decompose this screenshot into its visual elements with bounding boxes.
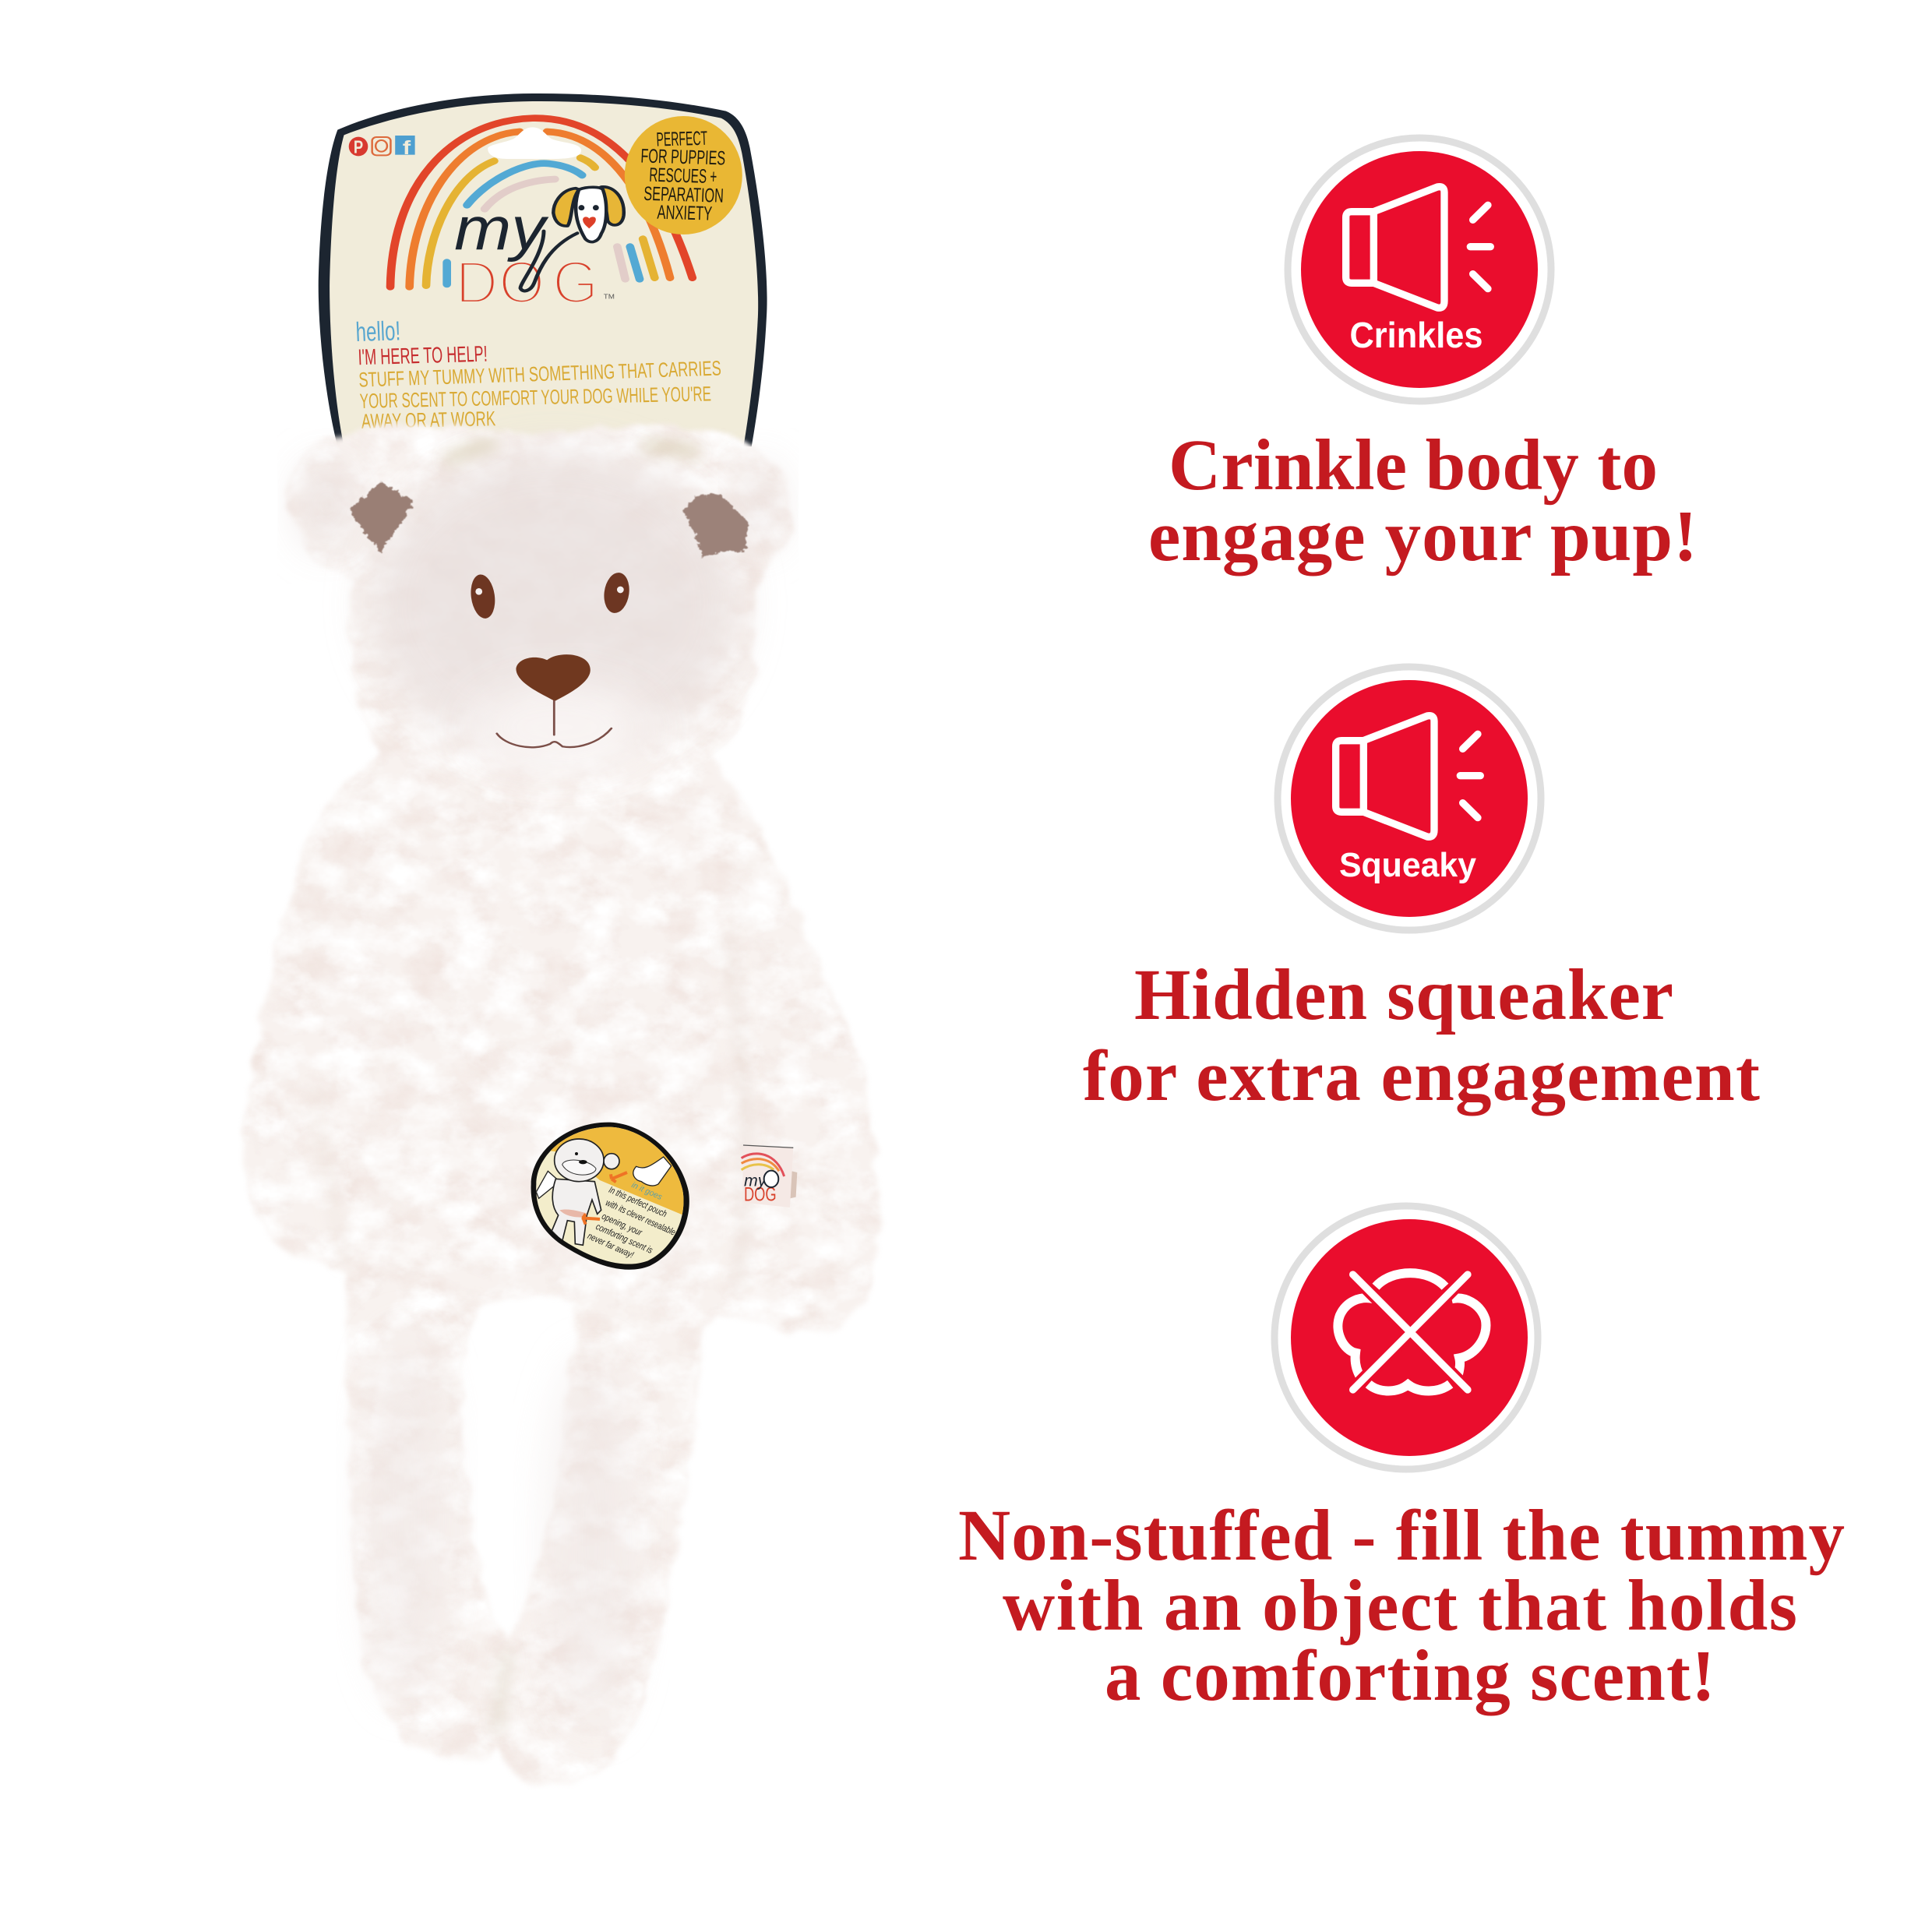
panel: non-stuffed feature xyxy=(958,1206,1845,1716)
yellow sticker: ANXIETY xyxy=(657,201,713,225)
tummy badge xyxy=(531,1122,689,1270)
panel: crinkle feature xyxy=(1148,138,1698,576)
hang card packaging xyxy=(319,93,767,446)
card copy: AWAY OR AT WORK xyxy=(361,407,496,433)
social icons xyxy=(349,136,415,159)
badge text xyxy=(586,1180,678,1260)
logo word DOG: DOG xyxy=(455,249,598,316)
trademark: TM xyxy=(604,293,615,300)
icon: squeaky speaker badge: Squeaky xyxy=(1339,846,1477,884)
badge text: comforting scent is xyxy=(594,1221,654,1256)
badge text: in it goes xyxy=(630,1180,664,1202)
panel: squeaker feature xyxy=(1083,667,1760,1116)
plush bear toy xyxy=(243,425,879,1785)
yellow sticker: PERFECT xyxy=(656,127,708,151)
dog head logo xyxy=(553,187,624,242)
heading: squeaker: Hidden squeaker xyxy=(1134,955,1673,1035)
side fabric tag: DOG xyxy=(744,1184,777,1206)
heading: non-stuffed: with an object that holds xyxy=(1003,1566,1797,1646)
card backing xyxy=(319,93,767,446)
badge text: opening, your xyxy=(600,1211,644,1238)
heading: non-stuffed: a comforting scent! xyxy=(1105,1636,1715,1716)
side fabric tag xyxy=(742,1145,797,1208)
left eye xyxy=(468,573,497,619)
card cream face xyxy=(330,101,758,446)
heading: squeaker: for extra engagement xyxy=(1083,1036,1760,1116)
card copy xyxy=(355,316,721,433)
rainbow logo xyxy=(390,118,693,287)
nose xyxy=(516,654,591,701)
badge rim xyxy=(531,1123,689,1270)
badge art xyxy=(536,1126,684,1264)
heading: crinkle: Crinkle body to xyxy=(1169,425,1658,506)
card copy: YOUR SCENT TO COMFORT YOUR DOG WHILE YOU'RE xyxy=(359,383,711,413)
social icons: f xyxy=(403,137,411,159)
badge text: never far away! xyxy=(586,1230,636,1260)
bear silhouette xyxy=(243,425,879,1785)
fur shading xyxy=(300,444,781,1732)
icon: crinkles speaker badge: Crinkles xyxy=(1349,315,1483,355)
card copy: STUFF MY TUMMY WITH SOMETHING THAT CARRIES xyxy=(358,357,721,392)
mouth xyxy=(497,701,612,747)
side fabric tag: my xyxy=(744,1172,767,1190)
leash loop xyxy=(520,231,577,291)
left ear patch xyxy=(349,481,412,552)
heading: crinkle xyxy=(1148,425,1698,576)
yellow sticker: RESCUES + xyxy=(649,164,717,188)
yellow sticker: SEPARATION xyxy=(643,183,724,207)
social icons: P xyxy=(354,136,363,157)
icon: no stuffing badge xyxy=(1274,1206,1538,1469)
heading: non-stuffed: Non-stuffed - fill the tummy xyxy=(958,1496,1845,1576)
hang hole xyxy=(488,127,581,159)
badge text: with its clever resealable xyxy=(604,1197,678,1238)
logo word my: my xyxy=(454,194,549,263)
bear face xyxy=(349,481,748,747)
heading: crinkle: engage your pup! xyxy=(1148,496,1698,576)
icon: crinkles speaker badge xyxy=(1288,138,1551,401)
yellow sticker xyxy=(625,116,742,234)
heading: non-stuffed xyxy=(958,1496,1845,1716)
card copy: I'M HERE TO HELP! xyxy=(358,341,488,370)
card copy: hello! xyxy=(355,316,401,347)
yellow sticker: FOR PUPPIES xyxy=(640,145,726,170)
right ear patch xyxy=(683,495,748,557)
right eye xyxy=(602,572,632,614)
heading: squeaker xyxy=(1083,955,1760,1116)
icon: squeaky speaker badge xyxy=(1278,667,1541,930)
badge text: In this perfect pouch xyxy=(607,1184,668,1219)
